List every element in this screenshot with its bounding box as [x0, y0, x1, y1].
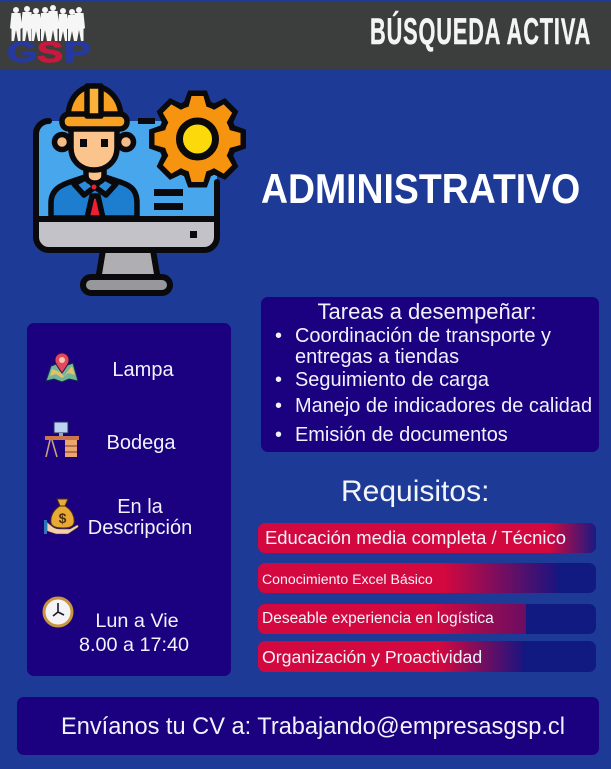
task list: Manejo de indicadores de calidad [295, 395, 592, 417]
icon: gear [150, 91, 246, 187]
bar: education [258, 523, 596, 553]
label: schedule [79, 610, 189, 656]
task: documents: • [275, 424, 282, 446]
header band [0, 1, 611, 69]
icon: group of workers [10, 5, 85, 41]
label: bodega: Bodega [107, 432, 175, 454]
icon: worker in monitor with gear [33, 83, 246, 296]
bar: excel [258, 563, 596, 593]
task: transport: • [275, 325, 282, 347]
label: schedule: Lun a Vie [95, 610, 179, 632]
panel: job details [27, 323, 231, 676]
heading: tasks: Tareas a desempeñar: [318, 299, 536, 324]
label: schedule: 8.00 a 17:40 [79, 634, 189, 656]
bar: logistics: Deseable experiencia en logística [262, 610, 494, 627]
label: salary: En la [117, 496, 163, 518]
icon: money bag: $ [59, 510, 67, 526]
logo letters [7, 37, 91, 69]
task list: entregas a tiendas [295, 346, 459, 368]
icon: map pin [45, 352, 79, 382]
task list: Coordinación de transporte y [295, 325, 551, 347]
bar: organization: Organización y Proactividad [262, 647, 482, 667]
bar: logistics [258, 604, 596, 634]
bar: education: Educación media completa / Técnico [265, 527, 566, 548]
task list: Seguimiento de carga [295, 369, 489, 391]
task list: Emisión de documentos [295, 424, 508, 446]
logo: GSP [7, 5, 91, 66]
icon: money bag [44, 498, 79, 534]
monitor stand [83, 250, 170, 293]
task: tracking: • [275, 369, 282, 391]
worker figure [51, 86, 137, 218]
heading: requirements: Requisitos: [341, 475, 489, 508]
task: indicators: • [275, 395, 282, 417]
monitor screen [36, 118, 217, 250]
icon: desk [45, 422, 79, 458]
panel: tasks [261, 297, 599, 452]
worker eyes [80, 139, 108, 190]
heading: busqueda activa: BÚSQUEDA ACTIVA [370, 11, 591, 52]
contact text: Envíanos tu CV a: Trabajando@empresasgsp.cl [61, 714, 565, 740]
heading: administrativo: ADMINISTRATIVO [261, 165, 580, 212]
label: lampa: Lampa [112, 359, 174, 381]
task list [275, 325, 592, 446]
label: salary [88, 496, 192, 538]
callout: send cv [17, 697, 599, 755]
bar: organization [258, 641, 596, 672]
icon: clock [42, 596, 74, 628]
label: salary: Descripción [88, 516, 192, 538]
bar: excel: Conocimiento Excel Básico [262, 571, 433, 587]
